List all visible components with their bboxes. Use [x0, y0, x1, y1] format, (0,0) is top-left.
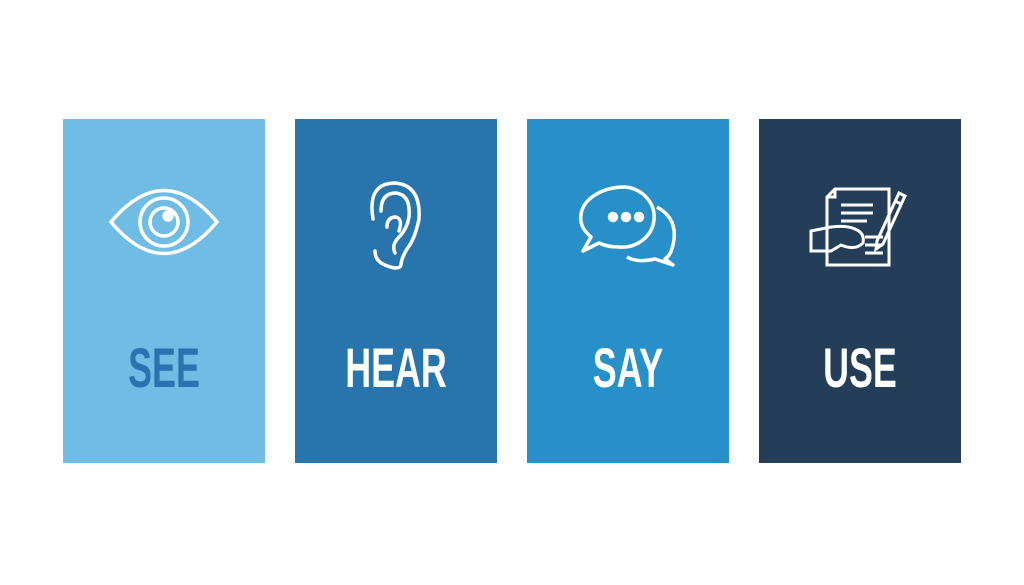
icon: writing hand — [810, 188, 907, 266]
panel: say — [527, 119, 729, 463]
icon: chat bubbles — [578, 185, 676, 267]
panel: hear — [295, 119, 497, 463]
icon: eye — [108, 188, 220, 256]
panel: use — [759, 119, 961, 463]
label: SAY: SAY — [593, 336, 663, 399]
label: USE: USE — [823, 336, 897, 399]
icon: ear — [370, 181, 421, 270]
panel: see — [63, 119, 265, 463]
label: HEAR: HEAR — [345, 336, 447, 399]
label: SEE: SEE — [128, 336, 200, 399]
